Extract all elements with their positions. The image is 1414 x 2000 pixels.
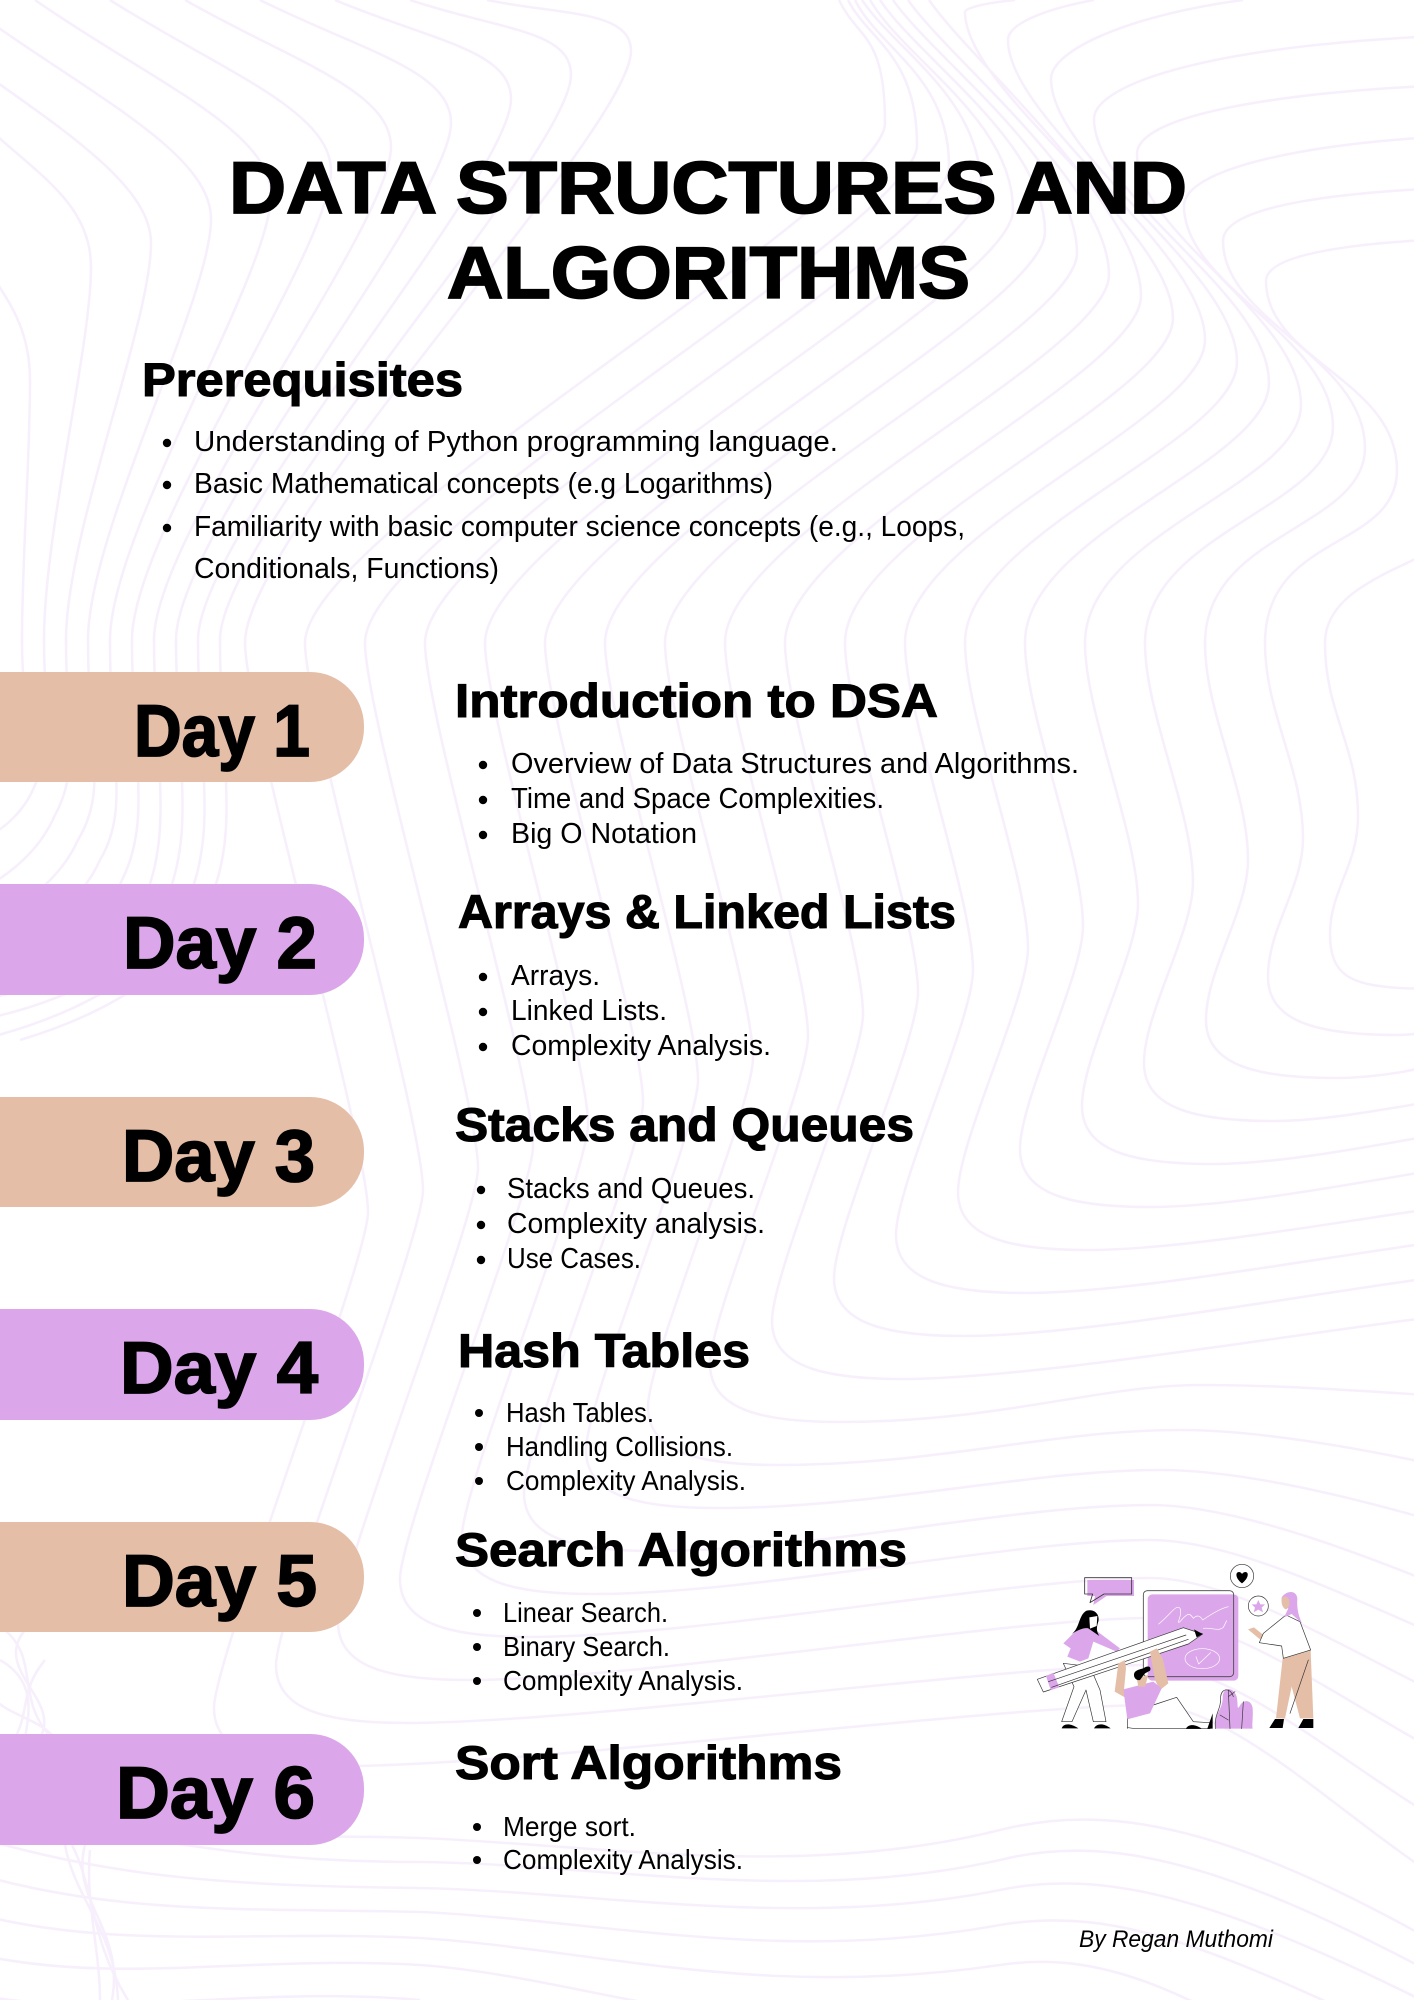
day 2 topics: Linked Lists. [511, 995, 667, 1027]
day 5 pill: Day 5 [122, 1541, 317, 1622]
day 4 heading: Hash Tables [458, 1324, 750, 1377]
day 2 pill: Day 2 [123, 903, 317, 984]
day 6 topics: Merge sort. [503, 1811, 636, 1842]
figure: seated man [1115, 1648, 1213, 1729]
day 6 pill: Day 6 [116, 1753, 315, 1834]
day 4 pill [0, 1309, 364, 1420]
day 6 topics: Complexity Analysis. [503, 1844, 743, 1875]
title [229, 148, 1187, 314]
title: DATA STRUCTURES AND [229, 148, 1187, 229]
day 1 pill [0, 672, 364, 782]
day 4 topics: Complexity Analysis. [506, 1465, 746, 1496]
day 4 topics: Handling Collisions. [506, 1431, 733, 1462]
day 5 topics [473, 1597, 743, 1696]
drawing board [1143, 1591, 1238, 1681]
author credit: By Regan Muthomi [1079, 1926, 1274, 1953]
icon: star badge [1248, 1596, 1268, 1616]
icon: heart badge [1230, 1564, 1254, 1588]
day 3 pill [0, 1097, 364, 1207]
day 5 topics: Linear Search. [503, 1597, 668, 1628]
day 3 heading: Stacks and Queues [455, 1098, 914, 1151]
day 1 topics: Overview of Data Structures and Algorithms. [511, 748, 1079, 780]
day 6 topics [473, 1811, 743, 1875]
day 1 pill: Day 1 [134, 691, 310, 772]
prerequisites list: Basic Mathematical concepts (e.g Logarithms) [194, 468, 773, 500]
day 3 topics [477, 1173, 765, 1275]
prerequisites list [163, 426, 965, 585]
day 6 pill [0, 1734, 364, 1845]
day 2 heading: Arrays & Linked Lists [458, 885, 956, 938]
day 4 topics: Hash Tables. [506, 1397, 654, 1428]
day 5 pill [0, 1522, 364, 1632]
day 3 topics: Stacks and Queues. [507, 1173, 755, 1205]
day 4 topics [475, 1397, 746, 1496]
prerequisites list: Conditionals, Functions) [194, 553, 499, 585]
day 2 topics: Complexity Analysis. [511, 1030, 771, 1062]
day 1 topics: Time and Space Complexities. [511, 783, 884, 815]
day 3 pill: Day 3 [122, 1116, 315, 1197]
day 5 heading: Search Algorithms [455, 1523, 907, 1576]
day 2 pill [0, 884, 364, 995]
day 3 topics: Complexity analysis. [507, 1208, 765, 1240]
figure: woman on the right [1248, 1592, 1313, 1728]
day 1 heading: Introduction to DSA [455, 674, 938, 727]
day 5 topics: Binary Search. [503, 1631, 670, 1662]
prerequisites list: Understanding of Python programming language. [194, 426, 838, 458]
speech bubble [1085, 1578, 1134, 1605]
title: ALGORITHMS [447, 233, 970, 314]
illustration: team drawing with giant pencil [1037, 1564, 1313, 1729]
day 6 heading: Sort Algorithms [455, 1736, 842, 1789]
day 1 topics: Big O Notation [511, 818, 697, 850]
day 2 topics [479, 960, 771, 1062]
giant pencil [1037, 1628, 1203, 1692]
plant [1215, 1689, 1253, 1729]
heading: prerequisites: Prerequisites [142, 353, 463, 406]
day 4 pill: Day 4 [120, 1328, 318, 1409]
figure: woman on the left [1062, 1610, 1120, 1728]
day 5 topics: Complexity Analysis. [503, 1665, 743, 1696]
day 1 topics [479, 748, 1079, 850]
day 2 topics: Arrays. [511, 960, 600, 992]
day 3 topics: Use Cases. [507, 1243, 641, 1275]
prerequisites list: Familiarity with basic computer science concepts (e.g., Loops, [194, 511, 965, 543]
